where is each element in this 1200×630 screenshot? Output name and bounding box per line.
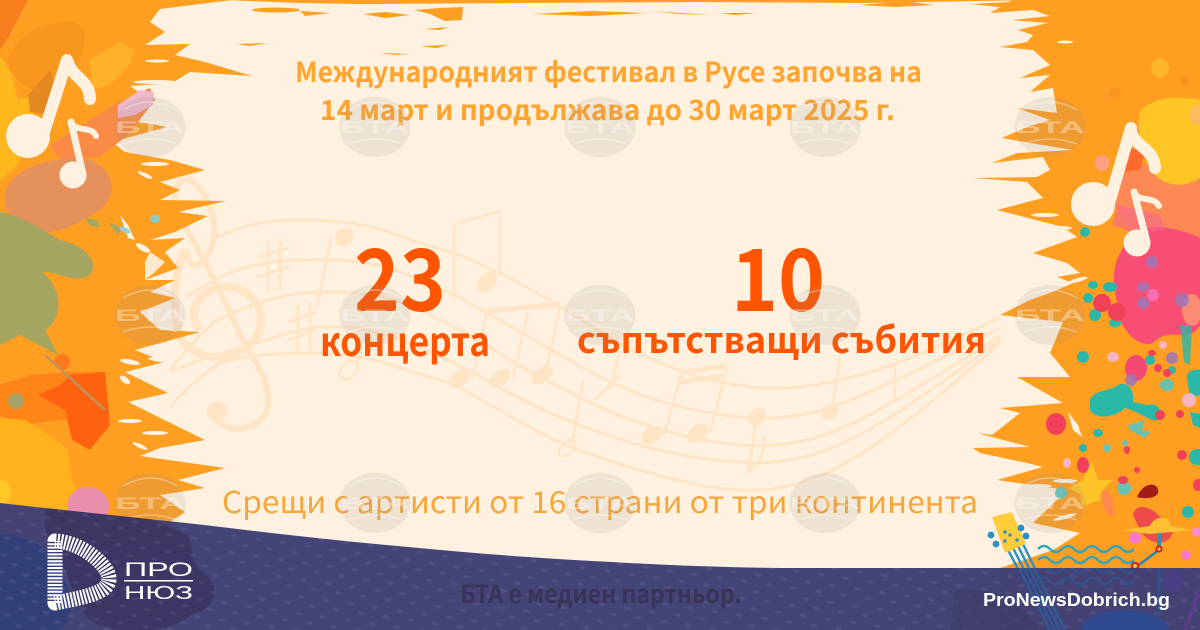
logo mark (55, 541, 109, 603)
watermarks: BTA globes: БТА (115, 118, 185, 137)
stat: concerts: концерта (320, 310, 490, 368)
watermarks: BTA globes: БТА (565, 494, 635, 513)
icon: right large music note (1071, 128, 1155, 226)
panel: left orange paint border (0, 0, 252, 540)
watermarks: BTA globes: БТА (565, 306, 635, 325)
heading: Международният фестивал в Русе започва на (295, 51, 922, 91)
logo: ПРО НЮЗ (55, 541, 193, 603)
watermarks: BTA globes: БТА (340, 494, 410, 513)
watermarks: BTA globes: БТА (115, 494, 185, 513)
icon: guitar (988, 514, 1065, 630)
watermarks: BTA globes: БТА (340, 118, 410, 137)
cream flecks along the paint edges (118, 40, 1088, 522)
stat: accompanying events: 10 (731, 211, 825, 336)
watermarks: BTA globes: БТА (790, 306, 860, 325)
text: artists from 16 countries: Срещи с артисти от 16 страни от три континента (222, 478, 978, 522)
logo wordmark (124, 560, 193, 603)
site URL: ProNewsDobrich.bg (983, 589, 1170, 610)
stat: concerts: 23 (354, 211, 446, 336)
logo wordmark: НЮЗ (124, 583, 193, 603)
panel: right orange paint border (973, 0, 1200, 630)
left paint splashes (0, 0, 160, 525)
watermarks: BTA globes: БТА (1015, 118, 1085, 137)
media partner note: БТА е медиен партньор. (460, 575, 742, 611)
panel: navy footer band (0, 500, 1200, 630)
heading (295, 51, 922, 129)
watermarks: BTA globes: БТА (340, 306, 410, 325)
watermarks: BTA globes: БТА (565, 118, 635, 137)
stat: concerts (320, 211, 490, 368)
background: staff with musical notes (170, 178, 1000, 490)
icon: star (1069, 461, 1112, 506)
icon: left small music note (60, 122, 96, 188)
watermarks: BTA globes: БТА (1015, 306, 1085, 325)
watermarks: BTA globes: БТА (1015, 494, 1085, 513)
watermarks: BTA globes: БТА (790, 118, 860, 137)
right paint splashes and confetti (1046, 58, 1200, 560)
stat: accompanying events (577, 211, 986, 364)
icon: waves (1038, 546, 1134, 563)
top edge paint streaks (225, 0, 1040, 55)
logo wordmark: ПРО (124, 560, 193, 581)
stat: accompanying events: съпътстващи събития (577, 312, 986, 364)
icon: cymbal and stand (1122, 518, 1192, 569)
icon: left large music note (6, 60, 90, 158)
watermarks: BTA globes: БТА (115, 306, 185, 325)
watermarks: BTA globes (114, 97, 1086, 533)
heading: 14 март и продължава до 30 март 2025 г. (320, 89, 895, 129)
icon: right small music note (1124, 192, 1159, 256)
watermarks: BTA globes: БТА (790, 494, 860, 513)
